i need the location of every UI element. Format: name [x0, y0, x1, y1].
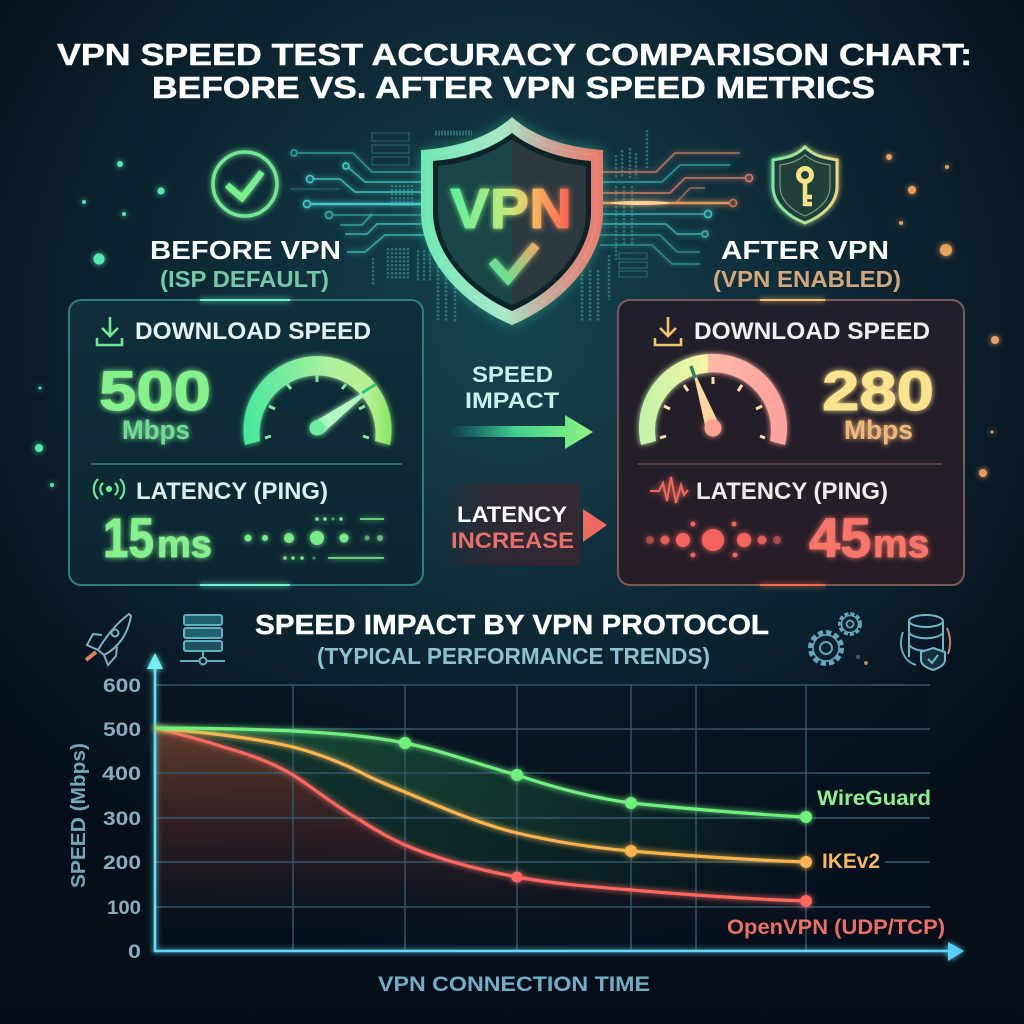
- shield VPN lettering: VPN: [450, 177, 572, 241]
- y axis tick labels: 600: [103, 676, 141, 697]
- axis: y: [147, 653, 163, 952]
- value: 280 Mbps: Mbps: [844, 415, 913, 445]
- value: 45ms: 45: [809, 506, 871, 569]
- latency pulse dots: [244, 517, 384, 560]
- icon: key shield: [773, 147, 837, 223]
- curve: OpenVPN: [155, 728, 812, 907]
- callout: latency increase: INCREASE: [451, 528, 574, 553]
- icon: database shield: [901, 615, 950, 670]
- value: 15ms: 15: [103, 506, 154, 569]
- series label: WireGuard: WireGuard: [817, 787, 931, 810]
- y axis title: SPEED (Mbps): [68, 743, 90, 888]
- value: 280 Mbps: [822, 359, 934, 445]
- heading: after VPN: [713, 235, 901, 292]
- icon: server: [180, 615, 225, 664]
- icon: download: [97, 317, 122, 345]
- gauge: before: [244, 356, 392, 445]
- callout: latency increase: LATENCY: [457, 502, 567, 527]
- value: 280 Mbps: 280: [822, 359, 934, 422]
- axis: x: [154, 942, 964, 961]
- line chart: speed impact by protocol: [68, 653, 964, 996]
- title: [57, 37, 972, 105]
- y axis tick labels: 100: [107, 898, 141, 919]
- heading: before VPN: BEFORE VPN: [150, 235, 341, 265]
- curve: WireGuard: [155, 728, 812, 823]
- title: VPN SPEED TEST ACCURACY COMPARISON CHART:: [57, 37, 972, 72]
- label: latency: LATENCY (PING): [696, 478, 888, 505]
- decorative particles: [35, 154, 999, 487]
- value: 500 Mbps: Mbps: [122, 415, 190, 445]
- panel: after VPN metrics: [618, 300, 964, 585]
- series label: IKEv2: IKEv2: [822, 850, 880, 873]
- callout: speed impact: [450, 362, 593, 449]
- arrow: latency: [583, 509, 607, 542]
- y axis tick labels: 300: [103, 809, 141, 830]
- value: 15ms: [103, 506, 212, 569]
- shield checkmark: [492, 245, 536, 279]
- heading: chart: [255, 609, 769, 669]
- y axis tick labels: 0: [128, 942, 141, 963]
- y axis tick labels: 500: [103, 720, 141, 741]
- data texture blocks: [372, 130, 647, 322]
- curve: IKEv2: [155, 728, 812, 868]
- icon: gears: [811, 614, 868, 665]
- heading: chart: SPEED IMPACT BY VPN PROTOCOL: [255, 609, 769, 640]
- callout: speed impact: IMPACT: [465, 388, 560, 413]
- chart fills under curves: [155, 728, 806, 862]
- icon: green check circle: [213, 152, 277, 216]
- gauge: after: [639, 354, 787, 445]
- icon: signal: [94, 479, 124, 499]
- label: download speed: DOWNLOAD SPEED: [135, 318, 371, 345]
- central VPN shield: [421, 117, 603, 325]
- value: 45ms: ms: [873, 523, 929, 566]
- heading: chart: (TYPICAL PERFORMANCE TRENDS): [317, 643, 710, 669]
- value: 500 Mbps: [99, 359, 211, 445]
- circuit lines: left: [290, 150, 425, 252]
- heading: after VPN: (VPN ENABLED): [713, 266, 901, 292]
- arrow: speed impact: [450, 415, 593, 449]
- panel: before VPN metrics: [69, 300, 423, 585]
- callout: speed impact: SPEED: [472, 362, 553, 387]
- heading: after VPN: AFTER VPN: [721, 235, 889, 265]
- value: 45ms: [809, 506, 929, 569]
- y axis tick labels: 200: [103, 853, 141, 874]
- label: download speed: DOWNLOAD SPEED: [694, 318, 930, 345]
- title: BEFORE VS. AFTER VPN SPEED METRICS: [152, 70, 875, 105]
- y axis tick labels: 400: [102, 764, 141, 785]
- x axis title: VPN CONNECTION TIME: [378, 973, 650, 996]
- value: 15ms: ms: [157, 524, 212, 566]
- heading: before VPN: (ISP DEFAULT): [160, 266, 329, 292]
- y axis tick labels: [102, 676, 141, 963]
- label: latency: LATENCY (PING): [136, 478, 328, 505]
- callout: latency increase: [440, 483, 607, 566]
- series label: OpenVPN: OpenVPN (UDP/TCP): [727, 916, 945, 939]
- icon: rocket: [86, 614, 131, 665]
- icon: download: [655, 317, 681, 345]
- circuit lines: right: [600, 153, 752, 264]
- icon: heartbeat pulse: [650, 477, 688, 503]
- latency pulse dots: [646, 522, 781, 558]
- value: 500 Mbps: 500: [99, 359, 211, 422]
- heading: before VPN: [150, 235, 341, 292]
